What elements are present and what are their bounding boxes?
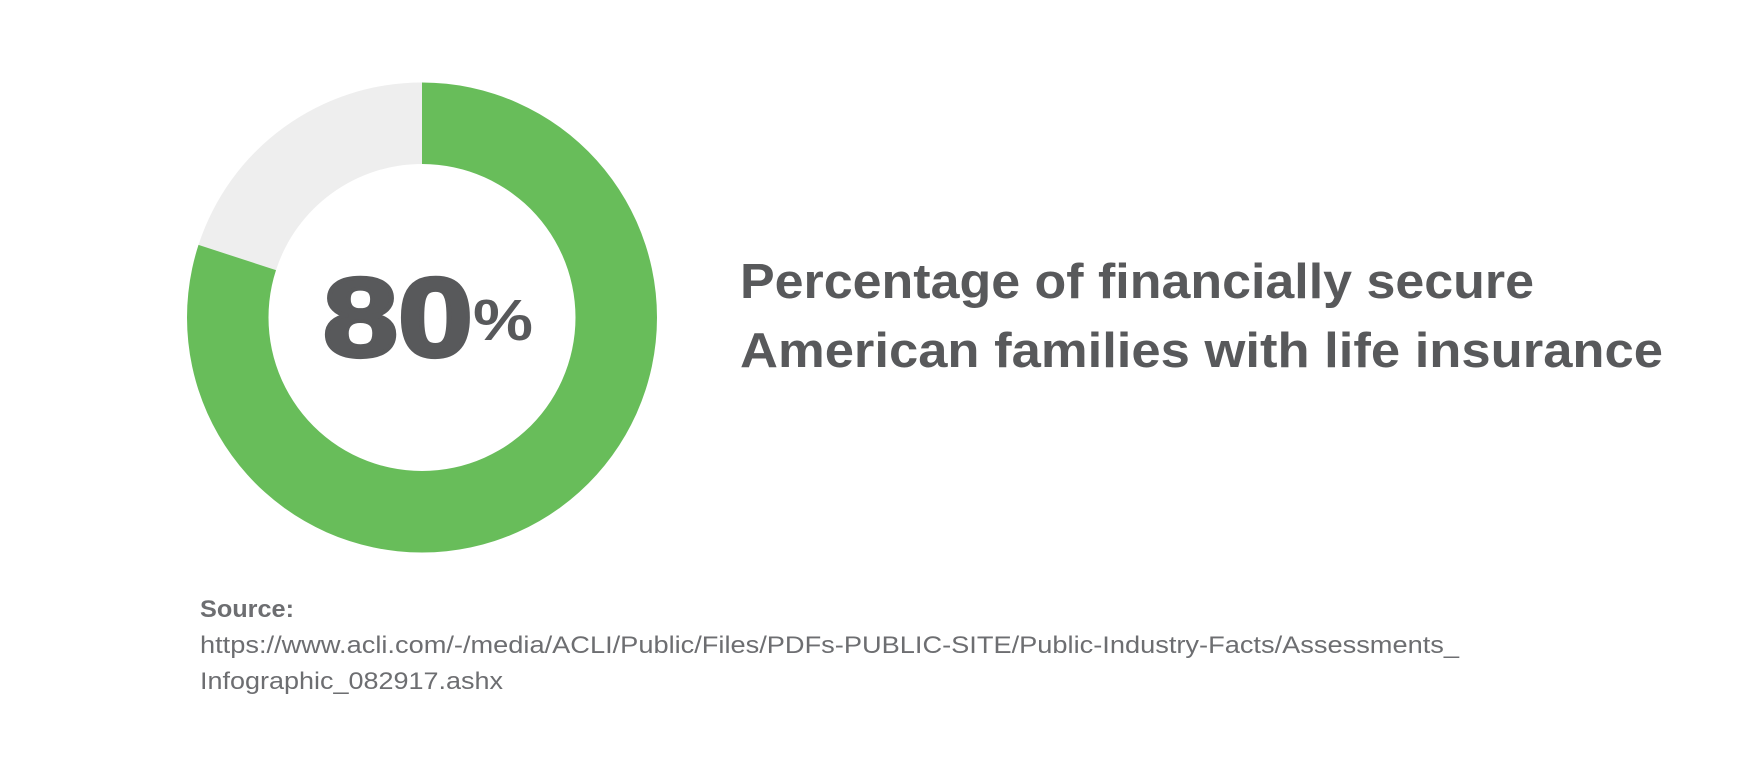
source note: Source: (200, 596, 294, 623)
big number: 80 (323, 255, 473, 380)
donut chart: 80 percent (187, 82, 657, 552)
percent sign: % (473, 288, 533, 353)
heading (740, 255, 1663, 378)
source note (200, 596, 1460, 695)
heading: Percentage of financially secure (740, 255, 1534, 309)
source note: https://www.acli.com/-/media/ACLI/Public/Files/PDFs-PUBLIC-SITE/Public-Industry-Facts/Assessments_ (200, 632, 1460, 659)
source note: Infographic_082917.ashx (200, 668, 503, 695)
donut segment: 80 percent (187, 82, 657, 552)
donut segment: remaining 20 percent (198, 82, 422, 270)
heading: American families with life insurance (740, 324, 1663, 378)
